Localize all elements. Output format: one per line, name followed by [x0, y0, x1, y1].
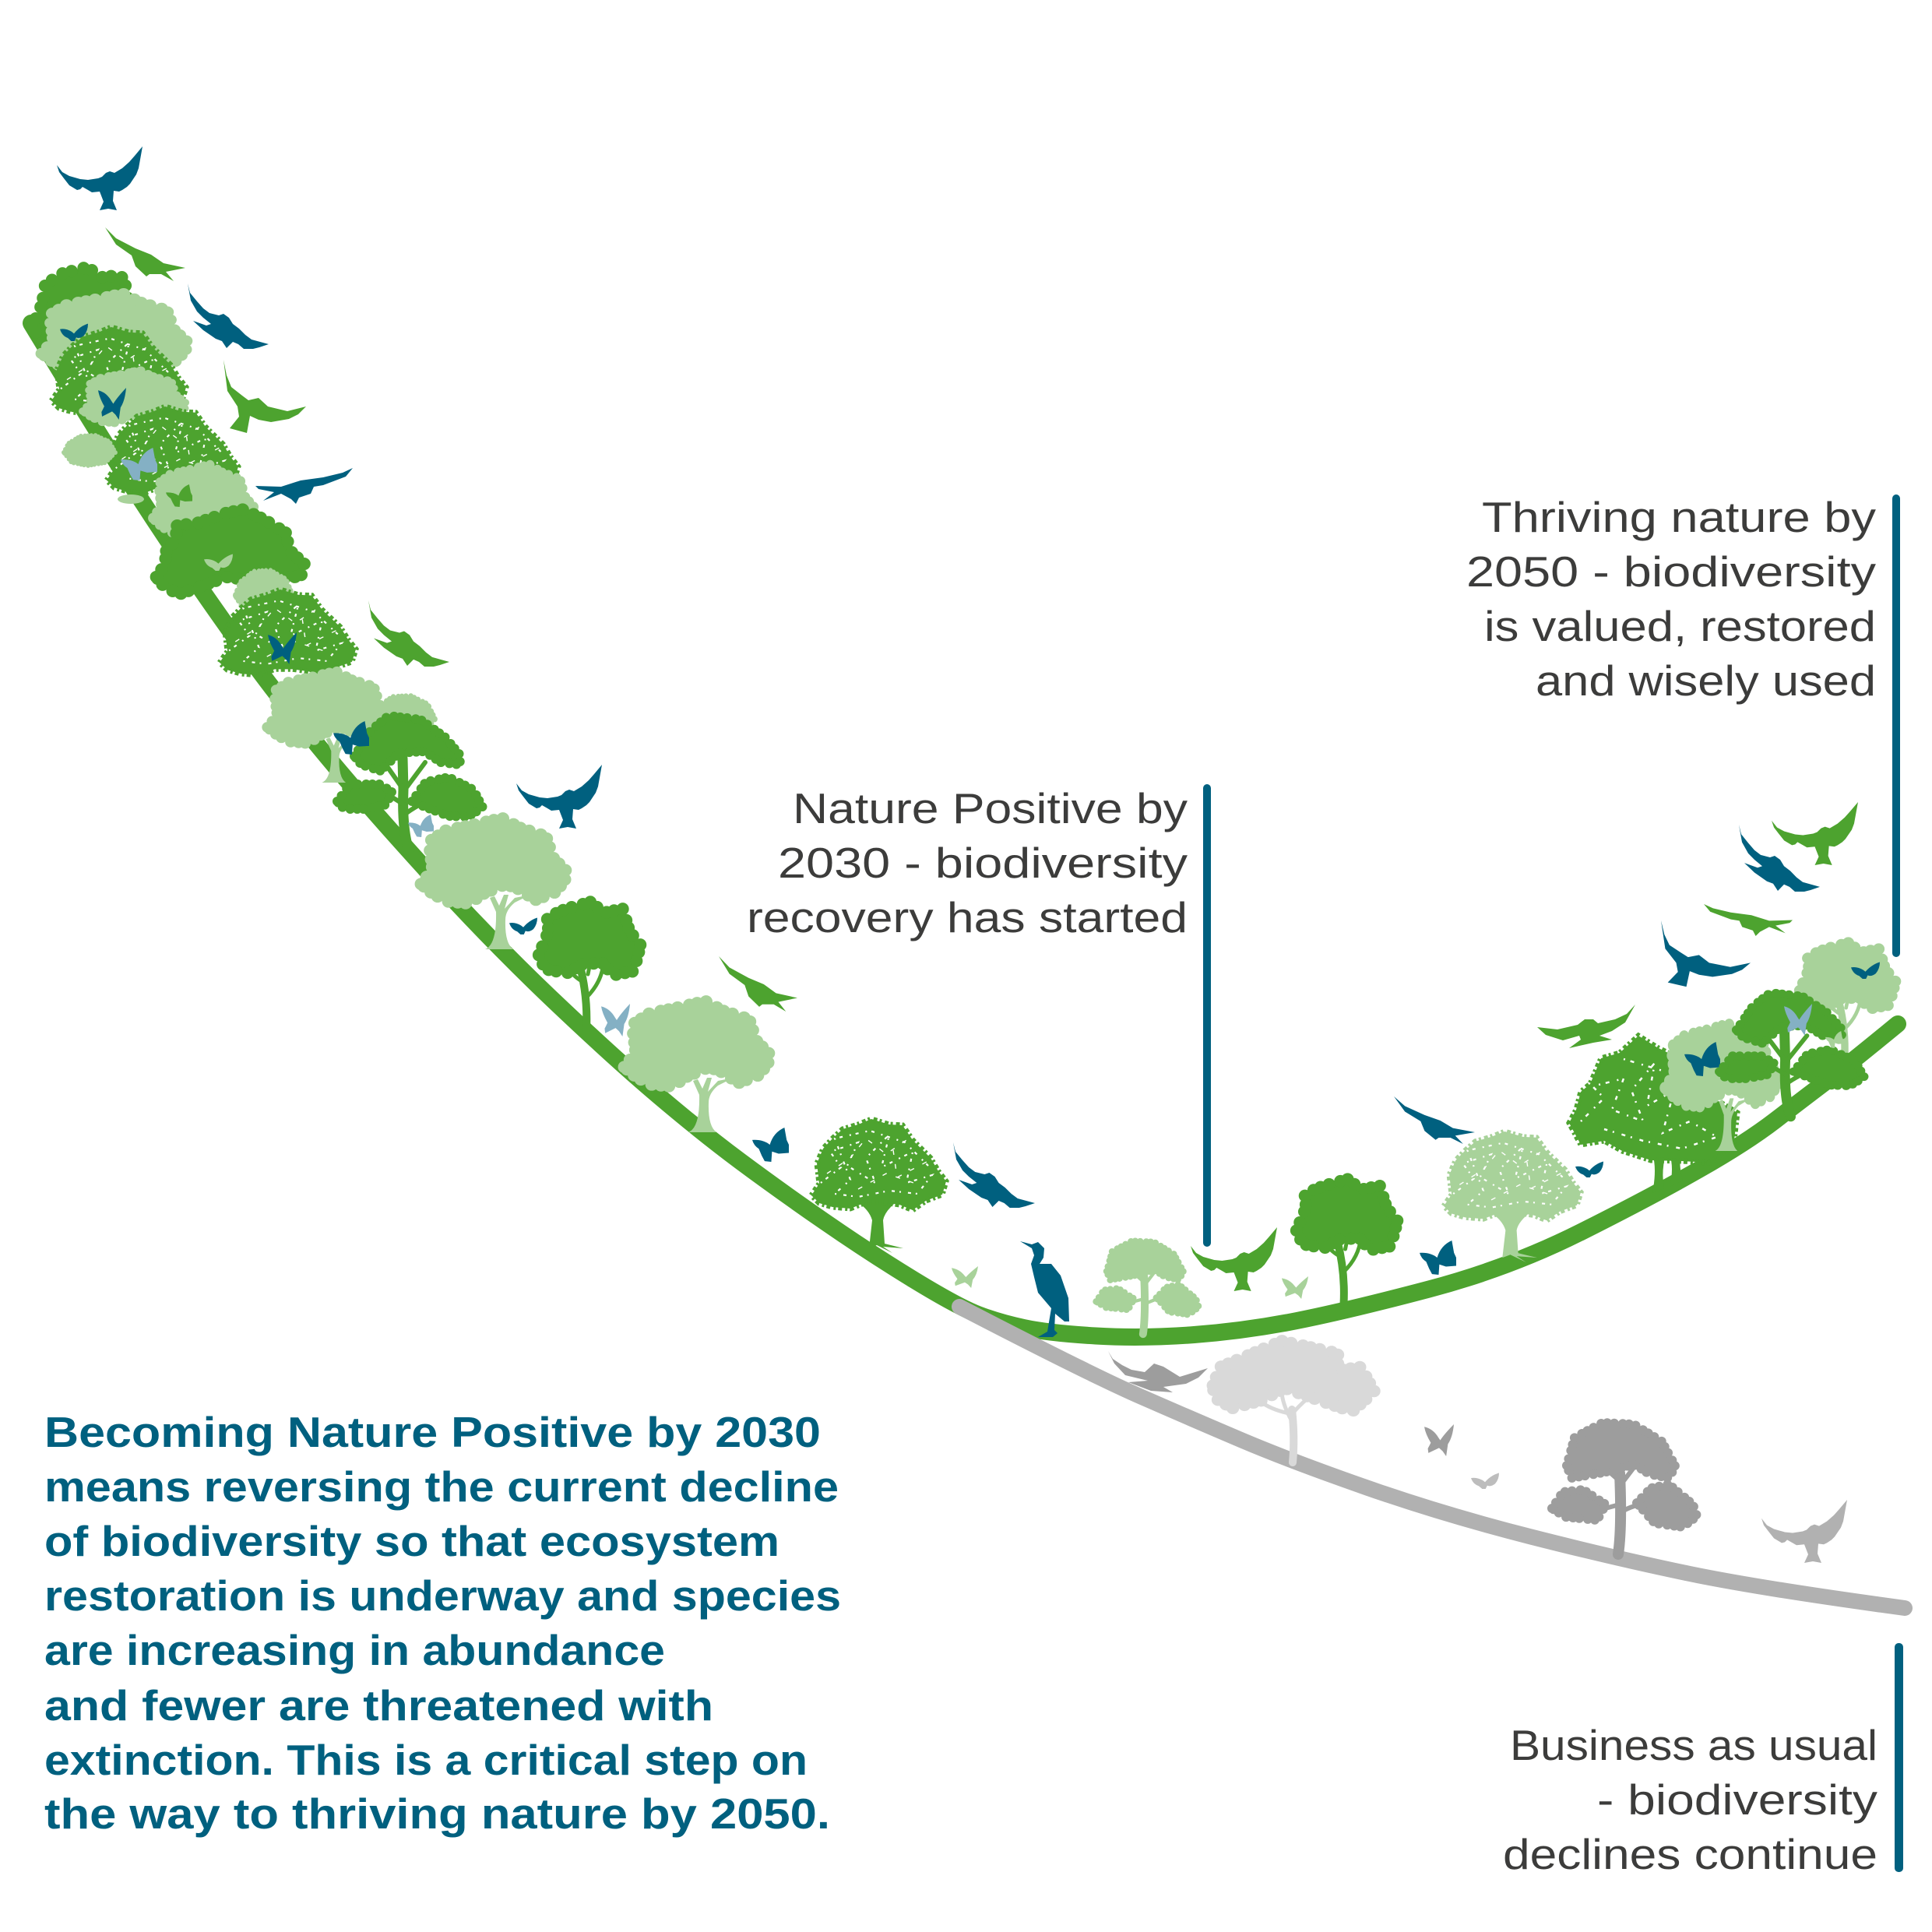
tree: fine leaf dark: [51, 327, 186, 415]
butterfly: [1420, 1240, 1456, 1275]
tree: fine leaf dark: [811, 1119, 946, 1253]
text block: explanation: [44, 1408, 841, 1838]
tree: light far right: [1800, 942, 1895, 1058]
callout text: Business as usual: [1503, 1721, 1878, 1878]
butterfly: [952, 1266, 978, 1288]
birds: [57, 146, 1858, 1291]
text block: explanation: of biodiversity so that ecosystem: [44, 1517, 779, 1565]
bird: blue: [953, 1142, 1035, 1208]
bird: pale grey: [1761, 1500, 1847, 1563]
callout bar: Thriving nature: [1892, 494, 1900, 957]
text block: explanation: means reversing the current decline: [44, 1462, 839, 1511]
bird: blue: [516, 765, 602, 829]
butterfly: [333, 721, 369, 755]
butterfly: [1575, 1161, 1603, 1177]
tree: dark round: [539, 902, 641, 1030]
tree: light large crown: [42, 294, 189, 371]
bird: green: [1537, 1005, 1635, 1048]
callout text: Thriving nature by 2050: [1466, 493, 1877, 705]
callout text: Nature Positive by 2030: recovery has started: [747, 893, 1188, 941]
bird: blue top: [57, 146, 143, 210]
tree: light wide: [1665, 1024, 1781, 1151]
bird: green: [719, 956, 797, 1012]
tree: light wide: [267, 671, 393, 783]
callout text: Nature Positive by 2030: Nature Positive by: [793, 784, 1188, 832]
tree: light crown: [83, 370, 187, 424]
bird: blue: [1739, 825, 1820, 892]
callout text: Thriving nature by 2050: is valued, restored: [1484, 602, 1876, 650]
text block: explanation: restoration is underway and species: [44, 1571, 841, 1620]
tree: pale grey: [1213, 1341, 1374, 1462]
bird: blue: [255, 468, 353, 504]
butterfly: pale grey: [1471, 1473, 1499, 1489]
callout text: Business as usual: Business as usual: [1510, 1721, 1877, 1769]
callout text: Business as usual: declines continue: [1503, 1830, 1877, 1878]
tree: light behind: [372, 696, 435, 737]
butterfly: [60, 324, 88, 341]
tree: dark umbrella two tier: [337, 716, 483, 850]
tree: light wide: [421, 818, 568, 949]
tree: small light cloud: [64, 435, 115, 466]
bird: green: [223, 360, 306, 433]
callout text: Nature Positive by 2030: [747, 784, 1188, 941]
tree: small light ellipse: [118, 494, 144, 504]
bird: green: [368, 600, 449, 667]
tree: dark umbrella crown: [157, 509, 304, 594]
butterfly: [752, 1128, 789, 1162]
bird: green: [1704, 904, 1793, 936]
curve: green nature positive path: [31, 323, 1898, 1337]
tree: dark umbrella two tier: [1719, 993, 1864, 1117]
butterfly: [509, 918, 537, 934]
callout text: Thriving nature by 2050: Thriving nature by: [1482, 493, 1877, 541]
butterfly: [1684, 1042, 1720, 1076]
text block: explanation: extinction. This is a critical step on: [44, 1736, 808, 1784]
butterfly: [268, 632, 297, 664]
butterfly: [1851, 962, 1880, 979]
callout bar: Nature Positive: [1203, 784, 1211, 1247]
bird: grey: [1108, 1351, 1208, 1392]
butterfly: [121, 448, 157, 480]
curve: grey business as usual path: [959, 1307, 1905, 1608]
butterfly: [1784, 1004, 1812, 1036]
grey trees and animals: [1108, 1341, 1847, 1563]
text block: explanation: are increasing in abundance: [44, 1626, 665, 1674]
tree: fine leaf dark: [107, 406, 238, 494]
callout bar: Business as usual: [1895, 1643, 1903, 1872]
text block: explanation: and fewer are threatened with: [44, 1681, 713, 1730]
group: upper left dense forest: [32, 267, 356, 677]
butterfly: grey: [1424, 1424, 1454, 1456]
butterfly: [1825, 1031, 1843, 1048]
tree: light two tier: [1096, 1241, 1198, 1334]
text block: explanation: Becoming Nature Positive by 2030: [44, 1408, 821, 1456]
icon: heron: [1020, 1241, 1069, 1337]
tree: light crown: [153, 465, 256, 533]
butterfly: [166, 484, 192, 507]
bird: blue: [188, 283, 269, 349]
butterfly: [408, 815, 434, 837]
callout text: Nature Positive by 2030: 2030 - biodiversity: [778, 839, 1188, 887]
text block: explanation: the way to thriving nature by 2050.: [44, 1789, 830, 1838]
bird: blue: [1394, 1096, 1475, 1144]
bird: green: [1772, 802, 1858, 865]
group: right forest: [1569, 942, 1895, 1193]
butterfly: [98, 388, 126, 420]
tree: dark cloud crown: [32, 267, 132, 397]
bird: blue: [1661, 920, 1751, 987]
tree: light wide: [625, 1001, 772, 1132]
tree: grey two tier: [1552, 1423, 1697, 1554]
butterfly: [204, 554, 233, 571]
bird: green: [1191, 1227, 1277, 1291]
tree: light arch: [235, 571, 293, 614]
tree: dark tall: [1297, 1179, 1398, 1304]
tree: oak cluster dark: [1569, 1036, 1737, 1193]
callout text: Thriving nature by 2050: 2050 - biodiversity: [1466, 547, 1877, 596]
butterfly: [601, 1004, 630, 1036]
callout text: Thriving nature by 2050: and wisely used: [1536, 656, 1876, 705]
callout text: Business as usual: - biodiversity: [1597, 1775, 1878, 1824]
tree: fine leaf dark: [220, 589, 356, 677]
bird: green: [105, 227, 185, 281]
tree: fine leaf light: [1444, 1131, 1581, 1262]
butterfly: [1282, 1276, 1308, 1299]
